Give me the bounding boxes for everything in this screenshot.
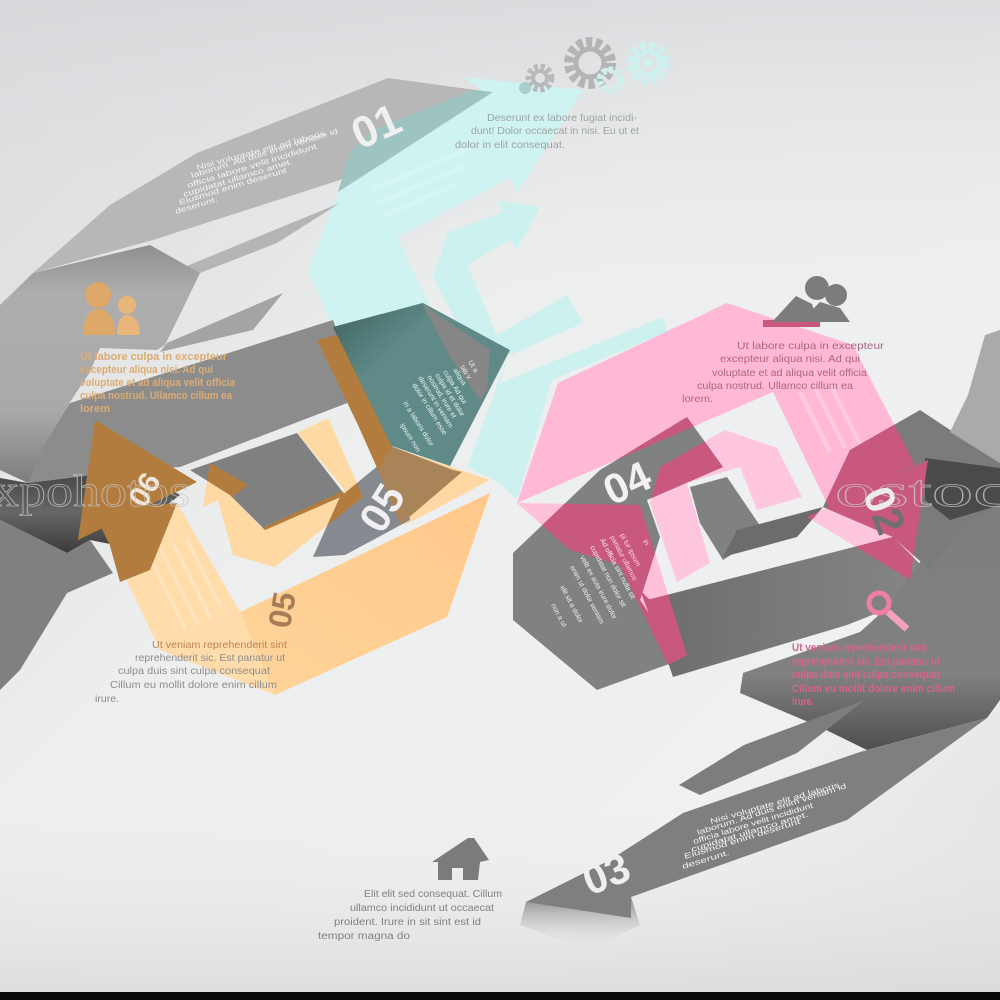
pink small arrow [650, 430, 802, 582]
gray lower right [740, 500, 1000, 750]
text: pink paragraph [682, 340, 885, 405]
teal strip lower [467, 317, 667, 500]
text: teal slab [398, 359, 479, 454]
text: ribbon 01: officia labore velit incididunt [186, 141, 319, 190]
text: ribbon 03: Nisi voluptate elit ad laboris [709, 780, 841, 826]
text: people block [80, 351, 236, 415]
icon: magnifier [869, 593, 907, 629]
orange U arrow [203, 418, 363, 567]
text: teal slab: nostrud, irure et [425, 374, 457, 420]
text: pink paragraph: lorem. [682, 393, 713, 405]
number 05: 05 [350, 476, 414, 540]
brown panel [378, 443, 462, 525]
ribbon 01 lower strip [160, 203, 340, 277]
text: people block: voluptate et ad aliqua velit officia [80, 377, 236, 389]
orange column dark part [100, 503, 177, 582]
text: pink slab: enim ut dolor veniam [568, 565, 605, 625]
text: house paragraph: Elit elit sed consequat. Cillum [364, 888, 502, 900]
text: ribbon 01: deserunt. [174, 194, 219, 216]
orange arrow head left [78, 420, 197, 540]
text: ribbon 01: Eiusmod enim deserunt [178, 165, 289, 207]
text: house paragraph: tempor magna do [318, 930, 410, 942]
text: teal slab: Ut a [466, 359, 479, 374]
text: pink slab: pariatur ullamco [608, 535, 638, 582]
text: orange paragraph: Ut veniam reprehenderit sint [152, 639, 287, 651]
number 04: 04 [596, 452, 659, 514]
text: pink slab: in [641, 539, 650, 547]
text: people block: culpa nostrud. Ullamco cillum ea [80, 390, 233, 402]
number 02: 02 [854, 480, 916, 540]
text: pink slab: Ad officia sint nulla sit [598, 538, 636, 600]
text: orange paragraph: Cillum eu mollit dolore enim cillum [110, 679, 277, 691]
pink strip [517, 503, 687, 665]
text: teal slab: in a laboris dolor [401, 400, 435, 448]
gray left block [0, 245, 200, 483]
teal arrow small [433, 200, 540, 352]
watermark right: ostoc [835, 465, 1000, 516]
text: house paragraph: proident. Irure in sit sint est id [334, 916, 481, 928]
text: orange paragraph: culpa duis sint culpa consequat [118, 665, 270, 677]
gray band under pink arrow [723, 507, 823, 557]
dark overlays of colored shapes on gray [102, 335, 928, 664]
text: orange paragraph: irure. [95, 693, 119, 705]
gray strip above ribbon 03 [679, 700, 865, 795]
pink faint lines [800, 384, 860, 452]
text: teal slab: culpa id et dolor [433, 372, 466, 419]
text: ribbon 03: deserunt. [681, 848, 730, 871]
number 05 brown: 05 [261, 589, 303, 631]
number 03: 03 [576, 843, 637, 904]
text: deserunt: dolor in elit consequat. [455, 139, 565, 151]
text: people block: Ut labore culpa in excepteur [80, 351, 228, 363]
text: teal slab: ipsum non [398, 422, 421, 454]
text: orange paragraph [95, 639, 287, 705]
text: pink lower paragraph: irure. [792, 696, 814, 708]
text: ribbon 03: laborum. Ad duis enim veniam id [696, 781, 847, 837]
gray lower left [0, 520, 113, 690]
text: teal slab: lab v [458, 364, 472, 381]
teal arrow large [308, 77, 583, 327]
gray wedge [423, 305, 490, 400]
text: people block: excepteur aliqua nisi. Ad qui [80, 364, 213, 376]
text: pink lower paragraph: reprehenderit sic. Est pariatur ut [792, 656, 940, 668]
text: ribbon 03: Eiusmod enim deserunt [683, 817, 803, 861]
teal strip upper [497, 295, 583, 355]
gray pink slab [513, 417, 723, 690]
orange strip over teal slab [317, 335, 392, 470]
icon: people orange [83, 282, 140, 335]
pink strip lower part [640, 590, 687, 665]
text: pink slab: velit ex aute irure dolor [578, 555, 618, 621]
text: deserunt [455, 112, 639, 151]
orange strip [317, 335, 490, 525]
number 01: 01 [344, 94, 409, 159]
gray top right [950, 330, 1000, 463]
text: teal slab: culpa Ad qui [441, 369, 468, 406]
text: orange paragraph: reprehenderit sic. Est pariatur ut [135, 652, 285, 664]
teal dark slab [333, 303, 510, 466]
gray right dark strip [925, 458, 1000, 520]
gray band wide right [647, 537, 943, 677]
orange column [100, 503, 275, 695]
text: pink slab: non a ut [549, 603, 567, 628]
text: deserunt: Deserunt ex labore fugiat incidi- [487, 112, 638, 124]
text: pink slab: elit sit a dolor [558, 585, 584, 625]
ribbon 03 [526, 718, 987, 918]
orange arrow head dark [78, 420, 197, 540]
text: pink lower paragraph: culpa duis sint culpa consequat [792, 669, 940, 681]
text: deserunt: dunt! Dolor occaecat in nisi. Eu ut et [471, 125, 639, 137]
orange lower panel [240, 493, 490, 695]
text: house paragraph: ullamco incididunt ut occaecat [350, 902, 494, 914]
text: teal slab: deserunt in veniam [416, 375, 454, 429]
text: pink lower paragraph: Cillum eu mollit dolore enim cillum [792, 683, 955, 695]
gray right ribbon [823, 410, 1000, 570]
text: pink paragraph: voluptate et ad aliqua velit officia [712, 367, 867, 379]
icon: people gray [763, 276, 850, 327]
gray center block [190, 433, 345, 530]
text: teal slab: dolor in cillum esse [410, 382, 448, 437]
dark ribbon left [0, 470, 180, 553]
text: pink lower paragraph: Ut veniam reprehenderit sint [792, 642, 927, 654]
ribbon 01 [33, 78, 493, 273]
text: ribbon 01 [174, 127, 339, 216]
gray center right [313, 450, 410, 557]
icon: gears [519, 42, 665, 94]
text: ribbon 03: cupidatat ullamco amet. [690, 810, 809, 854]
ribbon 03 shadow [520, 897, 640, 950]
orange faint text lines [147, 538, 220, 628]
text: ribbon 03 [681, 780, 847, 871]
gray band wide left [28, 320, 363, 483]
text: pink paragraph: excepteur aliqua nisi. Ad qui [720, 353, 860, 365]
text: pink slab: pi tur ipsum [618, 533, 641, 568]
text: ribbon 01: cupidatat ullamco amet. [182, 157, 294, 199]
text: ribbon 01: Nisi voluptate elit ad laboris [195, 129, 326, 172]
text: pink slab: cupidatat non dolor sit [588, 545, 627, 608]
text: pink paragraph: Ut labore culpa in excepteur [737, 340, 885, 352]
pink right arrow head [807, 460, 928, 580]
number 06: 06 [122, 467, 168, 513]
text: people block: lorem [80, 403, 110, 415]
gray center pink block [690, 477, 765, 560]
text: pink lower paragraph [792, 642, 955, 708]
text: pink slab [549, 533, 650, 628]
text: teal slab: aliqua [451, 367, 467, 387]
pink main panel [517, 303, 915, 510]
text: house paragraph [318, 888, 502, 942]
text: ribbon 01: laborum. Ad duis enim veniam id [190, 127, 339, 180]
icon: house [432, 838, 489, 880]
text: ribbon 03: officia labore velit incididunt [692, 800, 815, 846]
teal faint lines [372, 148, 470, 216]
teal overlap on ribbon [338, 90, 493, 192]
text: pink paragraph: culpa nostrud. Ullamco cillum ea [697, 380, 853, 392]
gray strip [160, 293, 283, 352]
